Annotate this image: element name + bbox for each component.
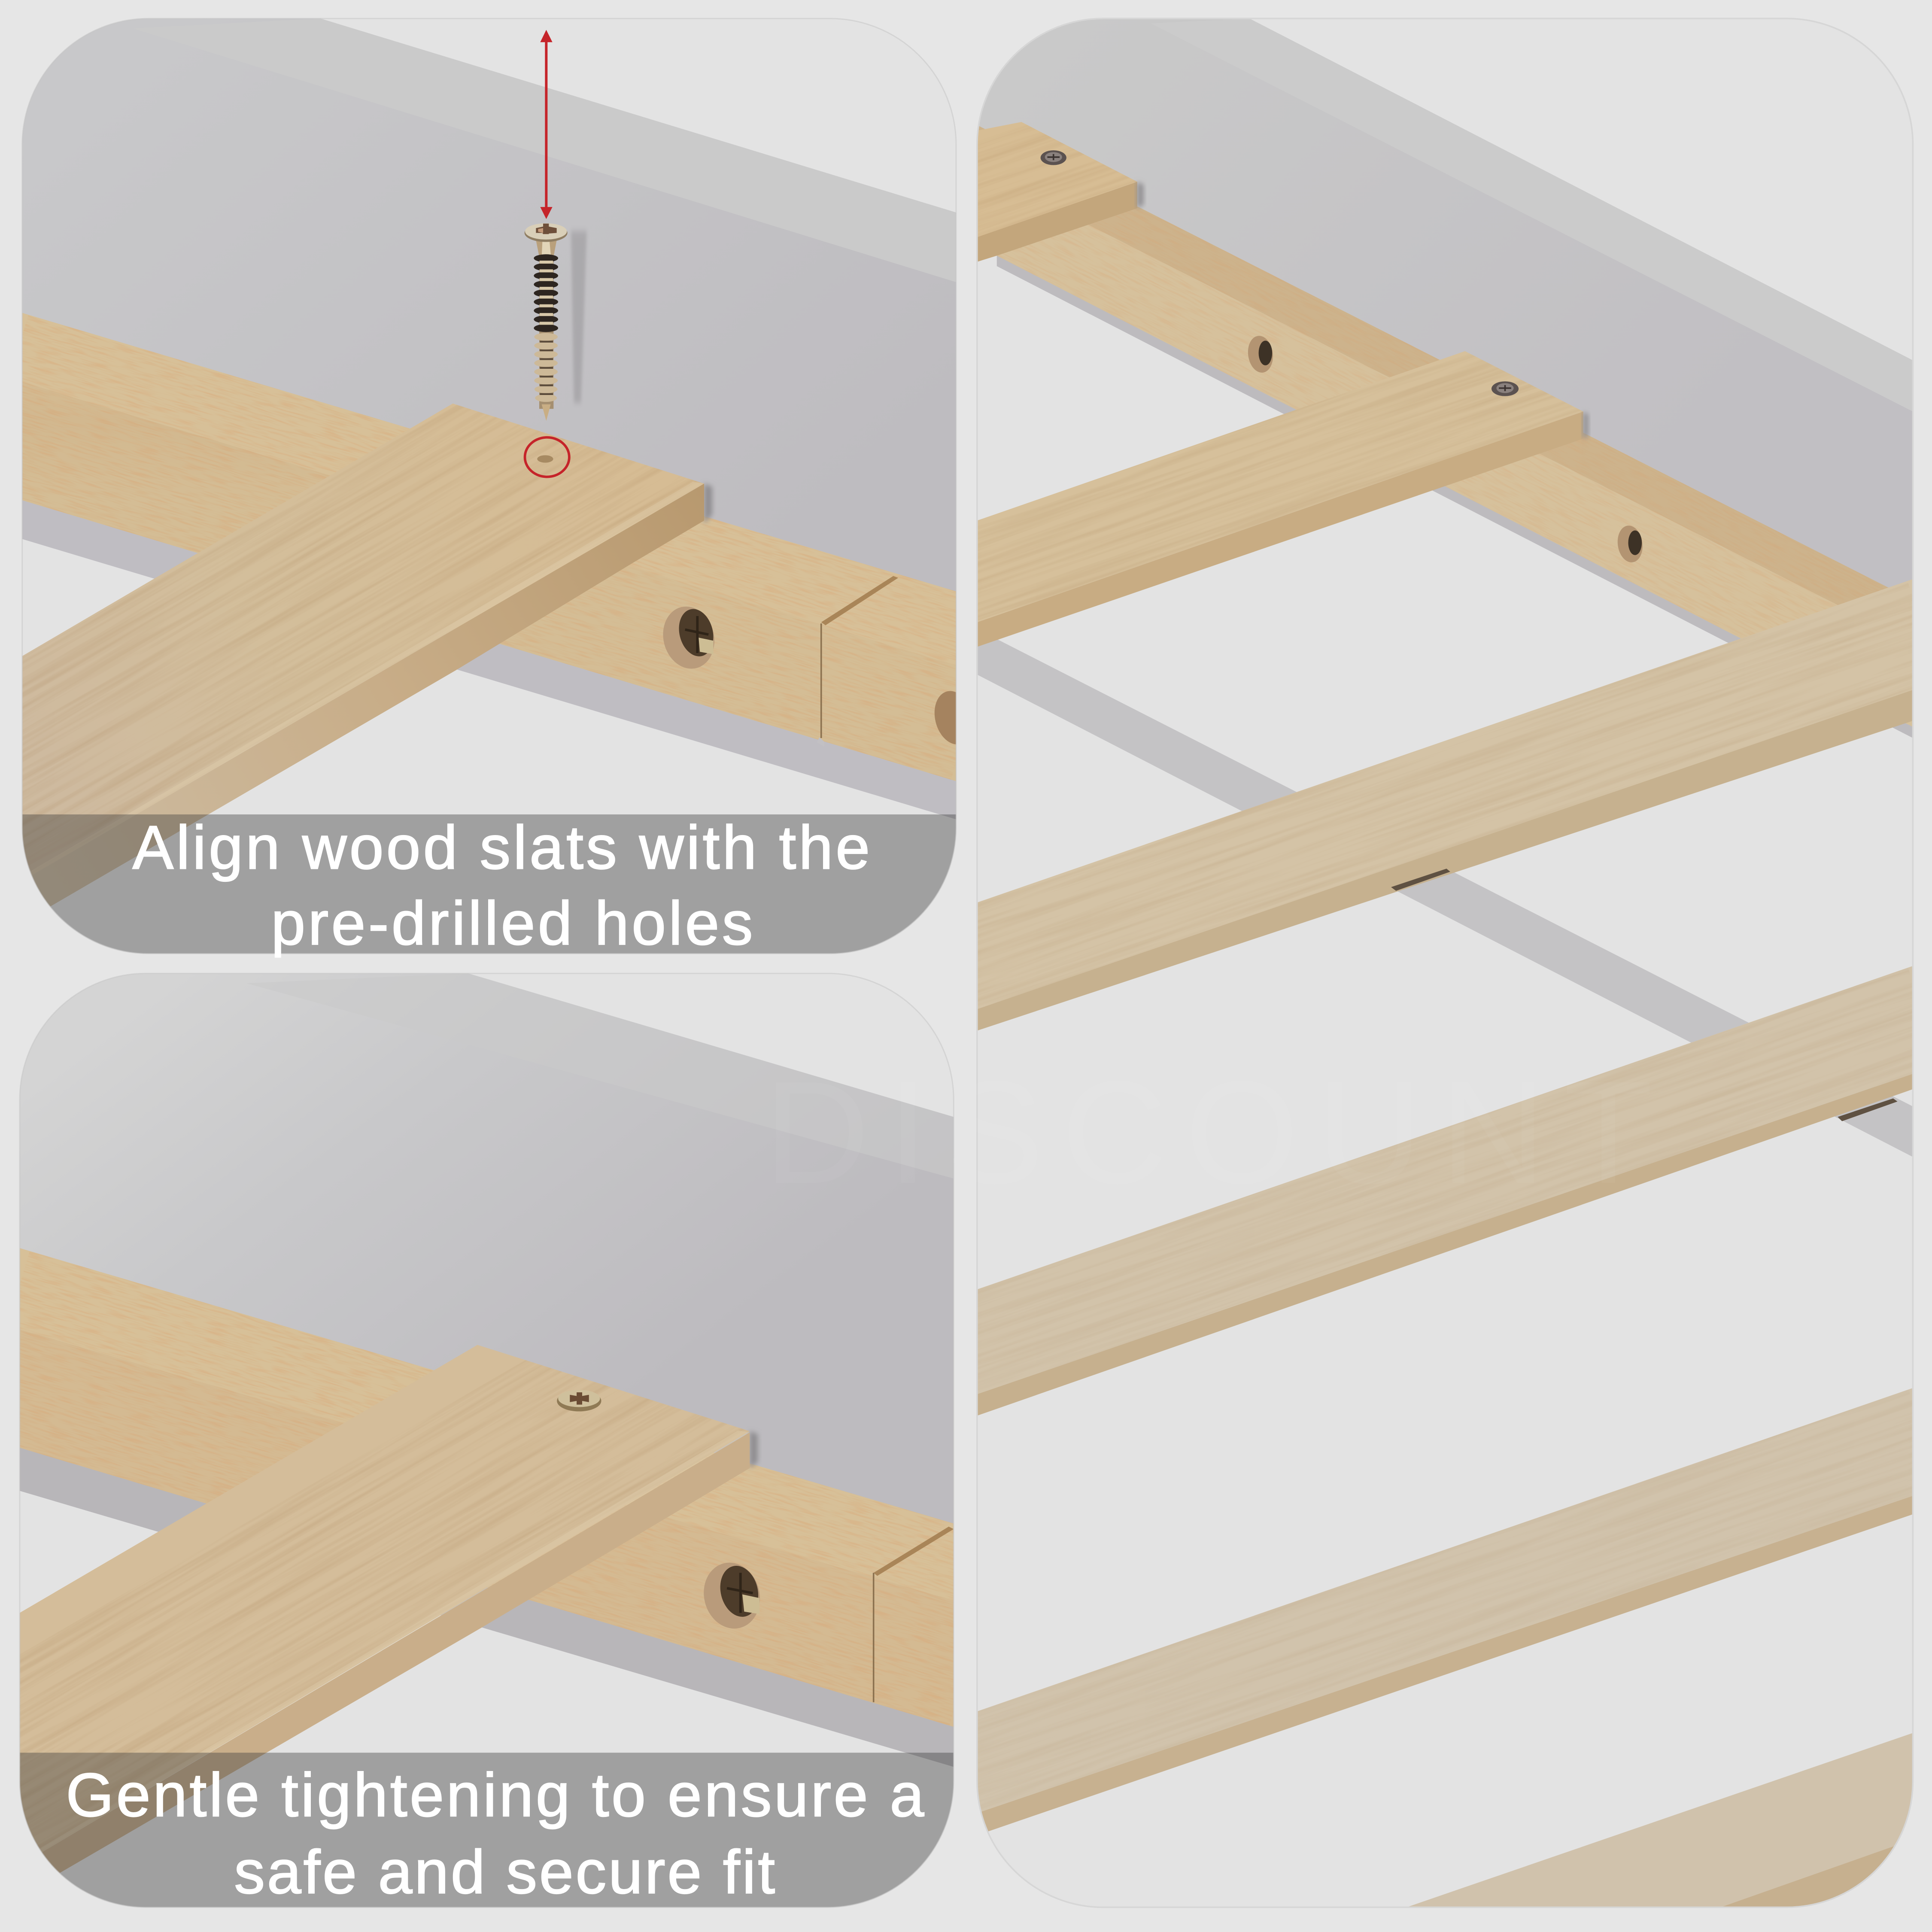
- panel: gentle tightening: [0, 973, 1013, 1932]
- slat F: [1406, 1733, 1913, 1907]
- slat B: [936, 291, 1625, 682]
- caption text: [133, 813, 870, 958]
- tightened screw: [557, 1390, 601, 1411]
- bed frame side panel: [22, 18, 956, 616]
- under-rail shadow strip: [997, 249, 1913, 738]
- panel outline: [20, 973, 954, 1908]
- support rail: [0, 1221, 1013, 1755]
- wood slat: [0, 1220, 903, 1932]
- red arrow: [540, 30, 553, 219]
- panel outline: [22, 18, 956, 954]
- slat A: [939, 86, 1178, 271]
- bed frame side panel: [20, 973, 954, 1539]
- bed frame side panel: [977, 18, 1913, 610]
- caption text: pre-drilled holes: [271, 889, 753, 958]
- screw heads on slats: [1041, 150, 1519, 396]
- screw: [525, 223, 568, 421]
- slat C: [939, 560, 1932, 1031]
- hole with screw in rail: [697, 1557, 767, 1634]
- wood slat: [0, 239, 879, 993]
- panel outline: [977, 18, 1913, 1907]
- caption text: safe and secure fit: [234, 1838, 775, 1907]
- lower frame strip: [22, 480, 956, 819]
- second rail hole: [929, 687, 978, 748]
- red circle around pilot hole: [525, 437, 569, 477]
- lower frame strip: [20, 1428, 954, 1767]
- hole with screw in rail: [663, 606, 714, 669]
- shadow beside slat end: [704, 483, 712, 524]
- caption band: [22, 814, 956, 954]
- slat E: [939, 1367, 1932, 1838]
- caption text: Gentle tightening to ensure a: [66, 1761, 924, 1829]
- screw and red double arrow: [525, 30, 587, 421]
- faint watermark: DISCOUNT: [764, 1051, 1653, 1214]
- caption text: Align wood slats with the: [133, 813, 870, 882]
- rail holes: [1245, 334, 1645, 564]
- support rail: [22, 313, 956, 781]
- shadow beside slat end: [750, 1431, 758, 1468]
- support rail: [949, 120, 1932, 732]
- dark contact shadows: [1391, 869, 1898, 1121]
- caption band: [20, 1753, 954, 1908]
- screw shadow: [571, 231, 587, 403]
- panel: align wood slats: [0, 18, 1013, 993]
- caption text: [66, 1761, 924, 1907]
- far rail: [977, 629, 1913, 1157]
- slat D: [940, 948, 1932, 1416]
- panel: side rail overview with slats: [936, 18, 1932, 1907]
